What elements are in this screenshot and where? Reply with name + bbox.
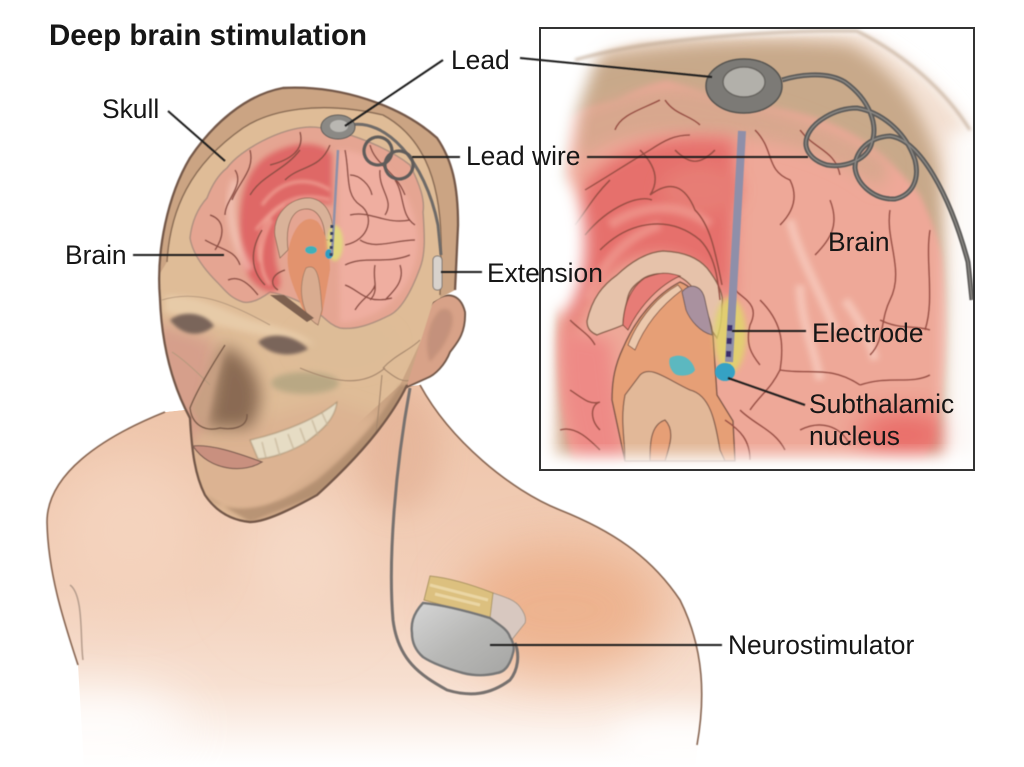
inset panel bbox=[539, 27, 975, 471]
inset: lower right red bbox=[857, 411, 953, 459]
label: Lead wire: Lead wire bbox=[466, 141, 580, 171]
inset: red ventricle bbox=[623, 273, 680, 330]
inset: ventricle purple bbox=[682, 286, 712, 335]
corpus callosum bbox=[275, 198, 333, 258]
eye: left bbox=[170, 314, 214, 334]
nose outline bbox=[190, 345, 247, 429]
illustration: neurostimulator bbox=[412, 576, 525, 675]
inset: lead cap bbox=[706, 59, 782, 113]
illustration: torso bbox=[47, 385, 701, 750]
illustration: ear bbox=[395, 295, 465, 387]
inset: subthalamic nucleus right bbox=[715, 363, 735, 381]
label: Neurostimulator: Neurostimulator bbox=[728, 630, 914, 660]
inset: tan skull layer bbox=[555, 41, 950, 460]
lower face bbox=[201, 412, 376, 507]
inset: white vignette bbox=[520, 15, 990, 486]
inset: red central region bbox=[565, 137, 735, 350]
label: Subthalamic nucleus: Subthalamic bbox=[809, 389, 954, 419]
inset: top brain beige bbox=[575, 87, 890, 190]
inset: lead wire bbox=[782, 75, 972, 300]
left lobe highlight bbox=[231, 180, 250, 270]
central red bbox=[240, 144, 332, 292]
nose shadow bbox=[205, 345, 260, 428]
thalamus bbox=[288, 219, 330, 315]
sulci bbox=[205, 132, 415, 310]
title: Deep brain stimulation bbox=[49, 19, 367, 52]
label: Brain inset: Brain bbox=[828, 227, 890, 257]
skull interior bbox=[150, 108, 441, 522]
label: Lead: Lead bbox=[451, 45, 510, 75]
illustration: head bbox=[150, 88, 458, 525]
teeth bbox=[250, 402, 337, 459]
inset: sulci bbox=[560, 100, 930, 460]
illustration: lead and wires bbox=[321, 115, 518, 694]
inset: lower left red bbox=[560, 330, 625, 465]
inset: fornix band bbox=[628, 285, 682, 350]
label: Extension: Extension bbox=[487, 258, 603, 288]
torso outline bbox=[47, 385, 702, 745]
inset: pale outer skin bbox=[545, 29, 973, 470]
skull inner line bbox=[167, 108, 441, 295]
yellow halo bbox=[327, 225, 343, 261]
dark wedge bbox=[270, 295, 314, 322]
label: Electrode: Electrode bbox=[812, 318, 924, 348]
inset: corpus callosum bbox=[587, 251, 722, 338]
inset: subthalamic nucleus left bbox=[669, 356, 695, 376]
eye: right bbox=[258, 336, 308, 354]
inset: yellow halo bbox=[714, 297, 746, 373]
label: Skull: Skull bbox=[102, 94, 159, 124]
subthalamic markers bbox=[305, 246, 317, 254]
inset: right lobe highlights bbox=[790, 220, 875, 380]
zygomatic patch bbox=[271, 372, 339, 394]
brow tones bbox=[165, 296, 315, 345]
leader lines bbox=[133, 58, 808, 645]
mouth bbox=[193, 446, 262, 469]
inset: thalamus bbox=[612, 282, 735, 461]
inset: brainstem bbox=[623, 371, 725, 461]
inset: skin edge line bbox=[575, 31, 970, 130]
inset: brain mass bbox=[556, 81, 947, 461]
illustration: brain bbox=[190, 127, 424, 328]
inset: electrode shaft bbox=[669, 59, 782, 381]
left cheek pink bbox=[163, 320, 216, 444]
label: Subthalamic nucleus: nucleus bbox=[809, 421, 900, 451]
chin lines bbox=[205, 385, 407, 522]
skull and jaw lines bbox=[300, 340, 420, 440]
label: Brain left: Brain bbox=[65, 240, 127, 270]
right lobe light bbox=[338, 150, 418, 323]
